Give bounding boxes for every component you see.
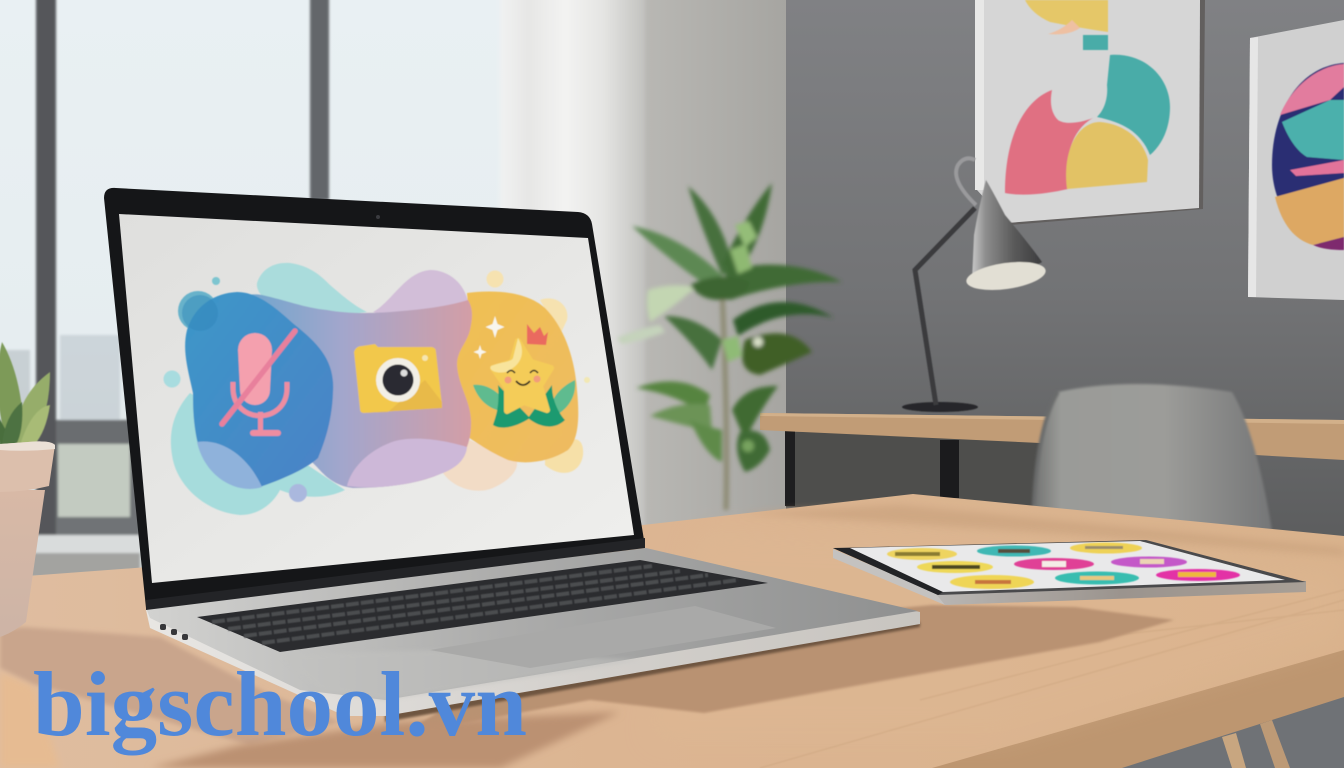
- icon: smiling star with crown and leaves: [473, 316, 575, 428]
- laptop: [104, 188, 920, 716]
- blue blob: [185, 292, 333, 489]
- chair: [1032, 384, 1272, 530]
- icon: yellow camera: [354, 344, 442, 413]
- back blobs: [171, 393, 345, 515]
- window with frame: [0, 0, 329, 577]
- curtain: [500, 0, 645, 540]
- plant: [617, 183, 842, 510]
- lower pale blob: [347, 439, 467, 487]
- succulent: [0, 342, 50, 445]
- potted plant: [0, 342, 55, 637]
- laptop lid: [104, 188, 645, 608]
- middle gradient blob: [215, 294, 472, 488]
- yellow blob: [457, 292, 578, 462]
- keyboard: [197, 560, 768, 652]
- laptop screen: [119, 214, 634, 583]
- artwork: right poster: [1248, 20, 1344, 300]
- wooden table: [0, 494, 1344, 768]
- tablet stickers: [887, 542, 1240, 589]
- laptop base: [146, 550, 920, 716]
- laptop shadow: [0, 605, 1174, 768]
- streak shadow on table: [742, 505, 1344, 556]
- trackpad: [430, 606, 776, 668]
- tablet: [833, 540, 1306, 605]
- watermark: bigschool.vn: bigschool.vn: [33, 653, 527, 755]
- palm rest light area: [280, 650, 640, 700]
- pot: [0, 490, 45, 637]
- sunlit wood patches: [650, 530, 1344, 740]
- screen illustration: [164, 263, 590, 515]
- camera dot: [376, 215, 380, 219]
- desk lamp: [902, 158, 1047, 412]
- far desk: [760, 413, 1344, 506]
- artwork: left poster: [975, 0, 1205, 225]
- icon: muted microphone: [222, 331, 295, 436]
- ports: [160, 624, 188, 640]
